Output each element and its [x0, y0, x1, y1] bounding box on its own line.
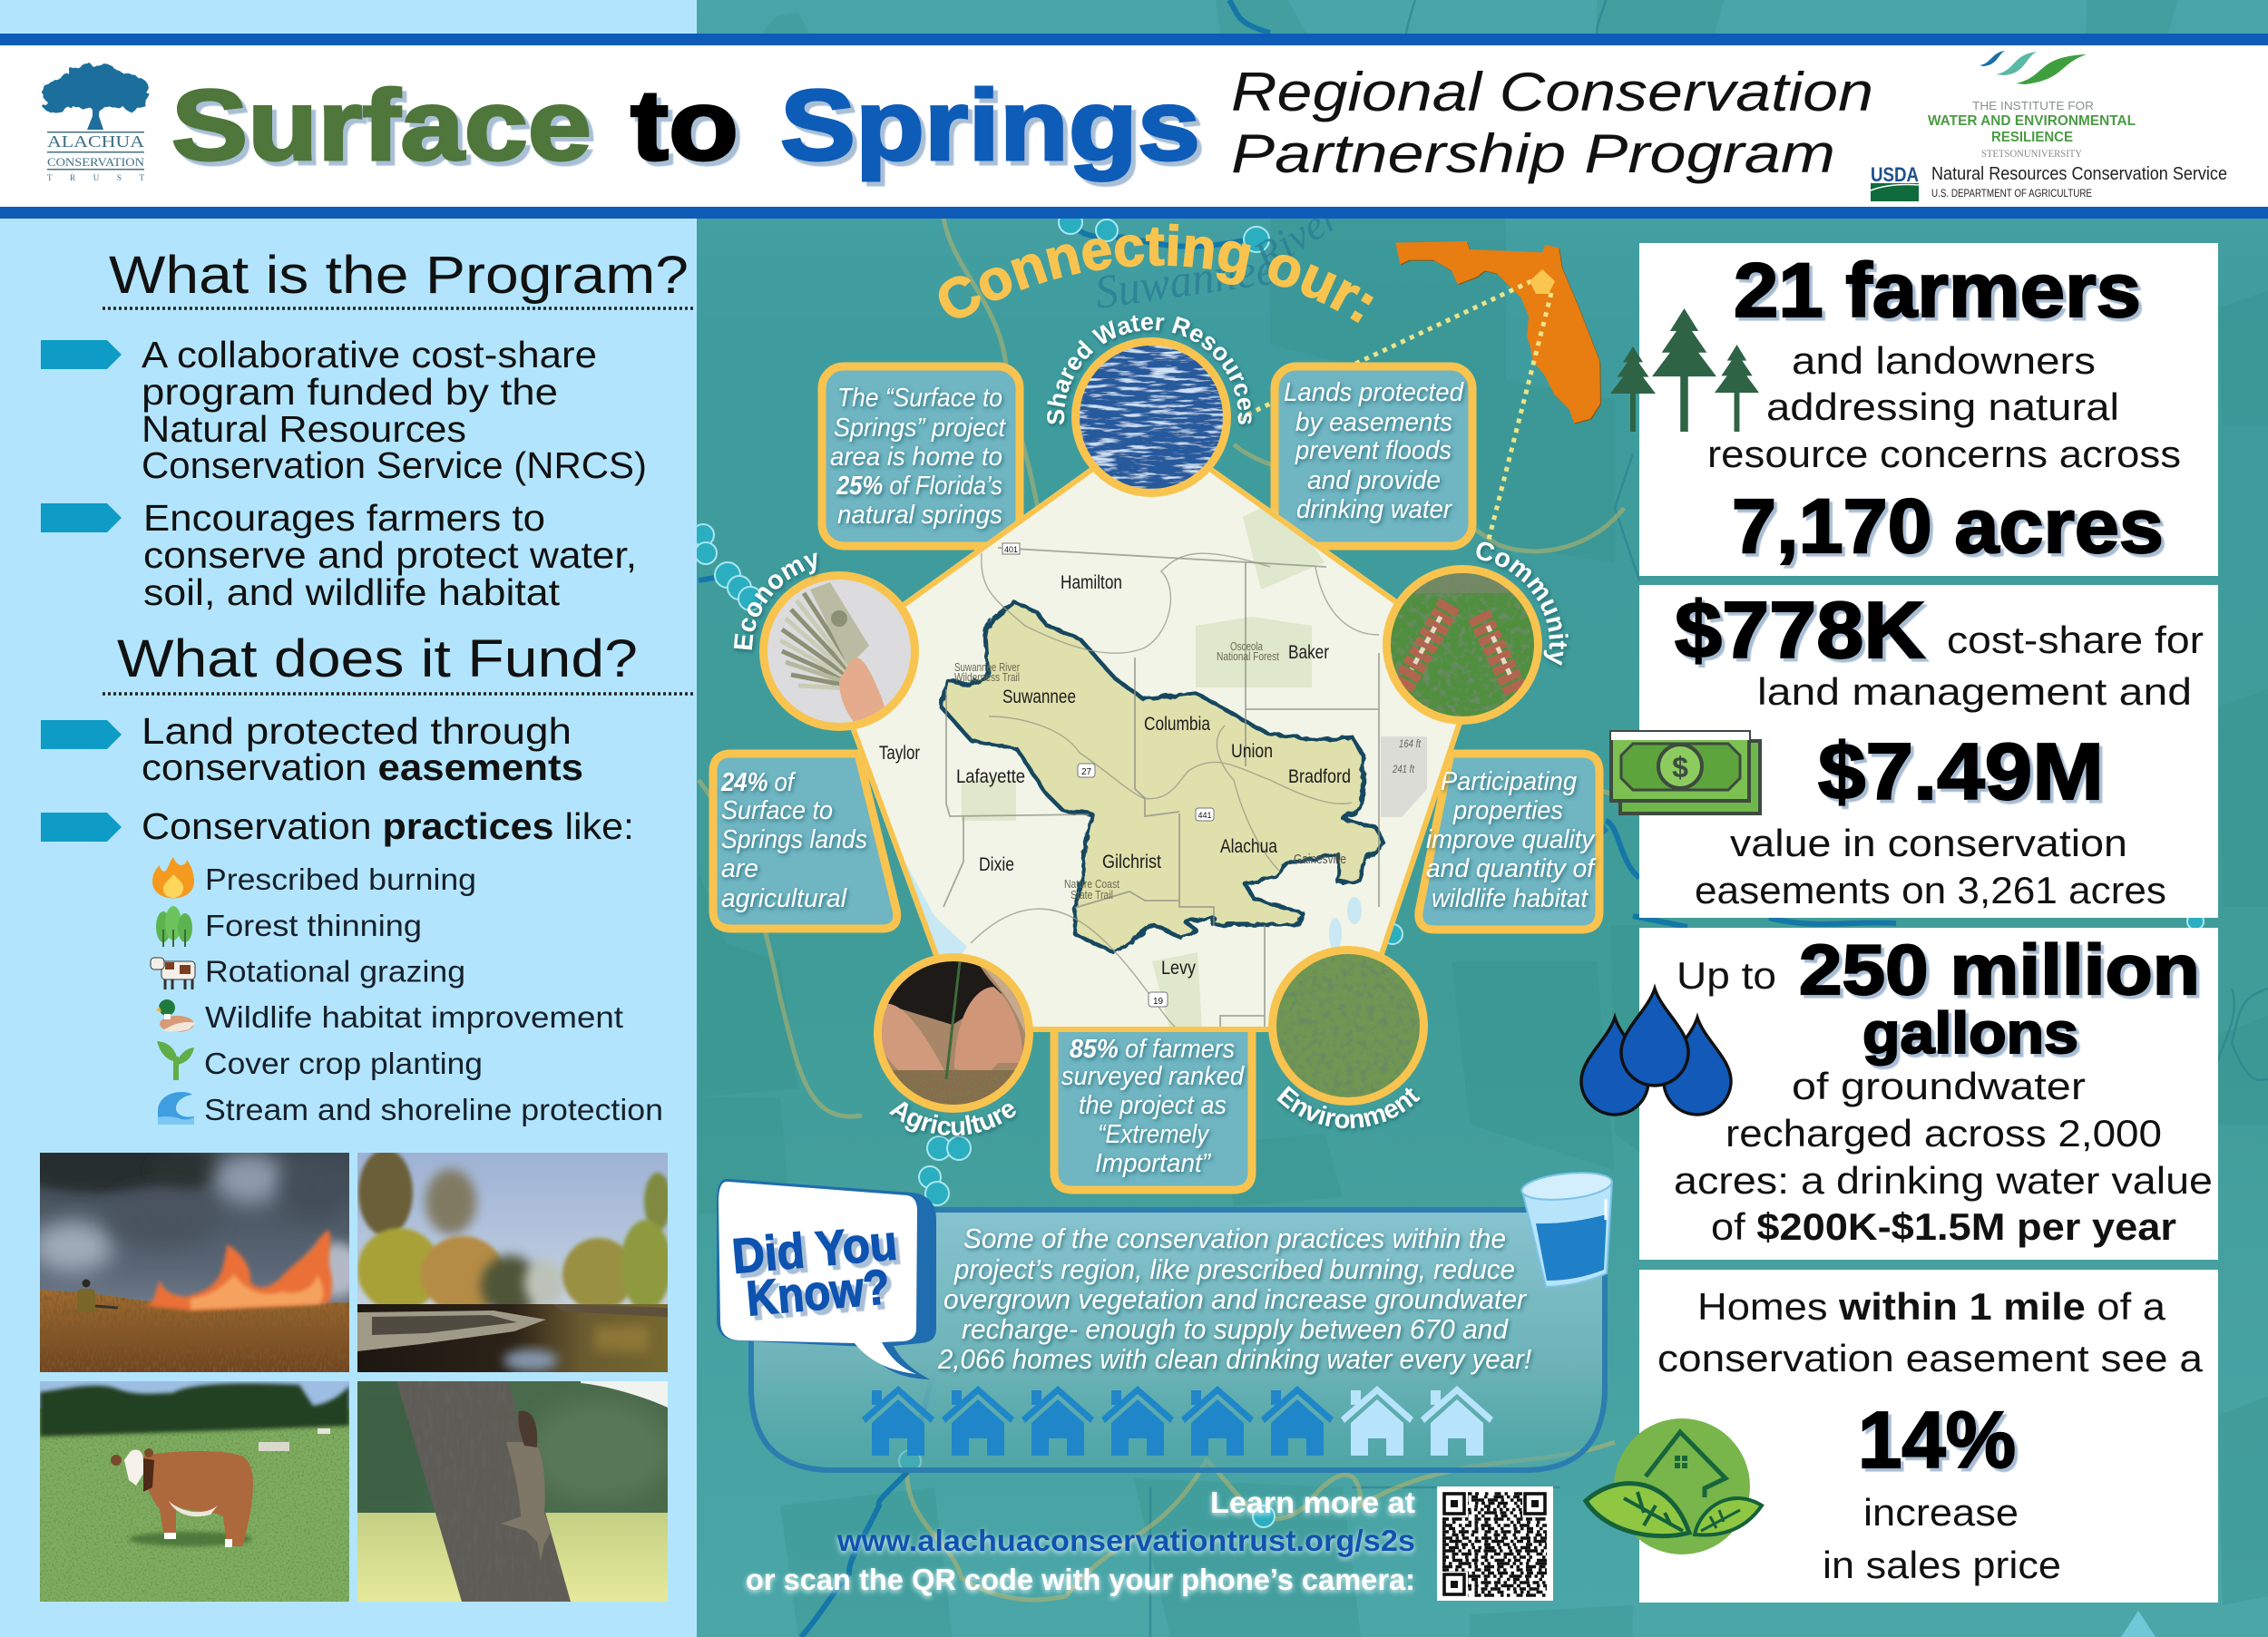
title: Surface to Springs	[171, 70, 1200, 181]
text: encourages farmers: soil, and wildlife habitat	[143, 571, 561, 613]
callout: 25% of springs: The “Surface to	[837, 384, 1002, 413]
text: encourages farmers: Encourages farmers to	[143, 497, 545, 539]
stat: $778K: $778K	[1675, 585, 1925, 675]
county labels: Lafayette	[956, 766, 1025, 787]
icon: cash: $	[1672, 751, 1688, 784]
label: Wildlife habitat improvement: Wildlife habitat improvement	[205, 1000, 623, 1034]
logo: Institute for Water and Environmental Resilience: RESILIENCE	[1991, 130, 2073, 145]
text: collaborative program: program funded by the	[142, 371, 558, 413]
logo: Institute for Water and Environmental Resilience: WATER AND ENVIRONMENTAL	[1928, 113, 2136, 129]
county labels: 241 ft	[1392, 763, 1415, 775]
description: of $200K-$1.5M per year	[1711, 1205, 2176, 1248]
county labels: Columbia	[1144, 714, 1210, 735]
callout: 85% of farmers	[1054, 1025, 1252, 1190]
icon: cash	[1611, 732, 1760, 814]
label: Forest thinning: Forest thinning	[205, 909, 422, 942]
stat: $7.49M: $7.49M	[1818, 726, 2104, 816]
text: cost-share: land management and	[1757, 670, 2192, 713]
callout: 25% of springs	[822, 366, 1020, 546]
fact text: recharge- enough to supply between 670 and	[962, 1313, 1510, 1345]
photo: prescribed fire	[40, 1153, 349, 1372]
speech bubble	[717, 1179, 936, 1379]
county labels: Osceola	[1230, 639, 1264, 653]
fact text: Some of the conservation practices within the	[963, 1223, 1506, 1254]
icon: trees	[156, 906, 192, 947]
icon: sprout	[157, 1041, 194, 1080]
county labels: Nature Coast	[1064, 877, 1119, 891]
title: Surface to Springs: Surface	[171, 70, 591, 181]
arrow bullet	[41, 503, 122, 532]
text: increase in sales price	[1823, 1491, 2061, 1586]
callout: 85% of farmers: the project as	[1079, 1091, 1227, 1120]
text: collaborative program: A collaborative cost-share	[142, 334, 597, 375]
county labels: 164 ft	[1399, 737, 1422, 750]
icon: house and leaves	[1586, 1418, 1762, 1554]
highway shields: 27	[1081, 767, 1091, 777]
text: land protected: conservation easements	[142, 746, 583, 788]
description: and landowners	[1792, 339, 2096, 382]
callout: 85% of farmers: Important”	[1095, 1149, 1211, 1178]
arrow bullet	[41, 340, 122, 369]
highway shields	[1002, 543, 1214, 1007]
title: Surface to Springs: Springs	[780, 70, 1200, 181]
watershed region	[942, 602, 1384, 953]
callout: 24% agricultural: Springs lands	[721, 825, 867, 854]
county labels: Alachua	[1220, 836, 1277, 857]
description: conservation easement see a	[1657, 1337, 2204, 1379]
logo: Alachua Conservation Trust: TRUST	[47, 173, 145, 182]
text: collaborative program: Natural Resources	[142, 408, 466, 450]
county labels: Baker	[1288, 642, 1329, 663]
circle: environment: Environment	[1276, 1086, 1422, 1132]
logo: Alachua Conservation Trust: ALACHUA	[47, 132, 144, 151]
highway shields: 441	[1198, 811, 1212, 820]
text: collaborative program	[142, 334, 647, 486]
dotted connector lines	[1234, 281, 1551, 543]
background: teal map: Suwannee	[1092, 243, 1279, 319]
description	[1674, 1065, 2213, 1248]
callout: lands protected: by easements	[1295, 408, 1452, 437]
county labels: Gilchrist	[1102, 852, 1161, 872]
callout: participating properties: wildlife habitat	[1432, 884, 1589, 913]
panel: 21 farmers	[1610, 243, 2218, 576]
callout: 25% of springs: area is home to	[830, 443, 1002, 472]
heading: Connecting our:: Connecting our:	[938, 223, 1374, 323]
panel: did you know	[717, 1169, 1613, 1470]
icon: cow	[151, 958, 195, 989]
callout: participating properties: improve quality	[1426, 825, 1595, 854]
callout: participating properties: properties	[1452, 796, 1563, 825]
text: land protected	[142, 710, 583, 788]
fact text: 2,066 homes with clean drinking water every year!	[937, 1343, 1531, 1375]
callout: lands protected: and provide	[1307, 466, 1441, 495]
logo: Alachua Conservation Trust: CONSERVATION	[47, 155, 145, 169]
learn more text: www.alachuaconservationtrust.org/s2s	[836, 1524, 1415, 1557]
callout: participating properties: and quantity of	[1426, 854, 1597, 883]
callout: 24% agricultural: agricultural	[721, 884, 848, 913]
subtitle: Regional Conservation Partnership Program	[1231, 62, 1873, 184]
label: Prescribed burning: Prescribed burning	[205, 862, 476, 896]
heading: What does it Fund?: What does it Fund?	[117, 629, 638, 688]
callout: 25% of springs: natural springs	[837, 501, 1002, 530]
icon: wave	[158, 1092, 194, 1125]
stat: 14%: 14%	[1858, 1395, 2016, 1485]
stat: 21 farmers: 21 farmers	[1734, 248, 2141, 333]
logo: Alachua Conservation Trust	[42, 64, 150, 182]
logo: Institute for Water and Environmental Resilience: THE INSTITUTE FOR	[1972, 99, 2094, 112]
circle: economy	[733, 552, 919, 731]
county labels: Hamilton	[1061, 572, 1122, 593]
circle: shared water resources: Shared Water Resources	[1047, 316, 1255, 428]
text: encourages farmers	[143, 497, 637, 613]
description: of groundwater	[1792, 1065, 2086, 1107]
left panel background	[0, 0, 697, 1637]
florida map	[1234, 241, 1601, 543]
header banner	[0, 34, 2268, 219]
callout: 24% agricultural: are	[721, 854, 758, 883]
callout: 25% of springs: Springs” project	[834, 414, 1007, 443]
stat: 7,170 acres: 7,170 acres	[1732, 483, 2164, 569]
county labels: Suwannee River	[954, 660, 1021, 674]
callout: lands protected: Lands protected	[1284, 378, 1464, 407]
photo: river	[357, 1149, 671, 1372]
label: Stream and shoreline protection: Stream and shoreline protection	[204, 1093, 663, 1126]
callout: 85% of farmers: 85% of farmers	[1070, 1035, 1235, 1064]
callout: 24% agricultural: 24% of	[720, 768, 797, 797]
county labels: Suwannee	[1002, 687, 1076, 707]
description	[1707, 339, 2181, 475]
callout: participating properties	[1419, 754, 1599, 930]
county labels: Wilderness Trail	[954, 670, 1020, 684]
heading: What is the Program?: What is the Program?	[109, 246, 689, 305]
callout: participating properties: Participating	[1441, 767, 1577, 796]
fact text: project’s region, like prescribed burning, reduce	[953, 1253, 1515, 1285]
description: resource concerns across	[1707, 433, 2181, 475]
stat: 250 million gallons	[1799, 930, 2200, 1066]
panel: funding	[1611, 585, 2218, 918]
learn more text: or scan the QR code with your phone’s camera:	[746, 1563, 1415, 1596]
county labels: Union	[1231, 741, 1273, 762]
callout: 25% of springs: 25% of Florida’s	[836, 472, 1002, 501]
icon: duck	[156, 999, 196, 1032]
label: Rotational grazing: Rotational grazing	[205, 954, 465, 989]
label: Cover crop planting: Cover crop planting	[204, 1047, 483, 1080]
county labels: Bradford	[1288, 766, 1351, 787]
description: Homes within 1 mile of a	[1697, 1285, 2166, 1328]
QR code	[1437, 1486, 1553, 1601]
speech bubble: Did You	[730, 1215, 899, 1284]
learn more text: Learn more at	[1210, 1486, 1415, 1519]
icon: fire	[152, 857, 194, 898]
text: easement value: easements on 3,261 acres	[1695, 869, 2166, 911]
text: cost-share: cost-share for	[1947, 619, 2204, 661]
circle: economy: Economy	[733, 552, 820, 653]
arrow bullet	[41, 720, 122, 749]
text: easement value: value in conservation	[1730, 822, 2127, 864]
callout: lands protected: prevent floods	[1295, 436, 1452, 465]
text: increase in sales price: increase	[1863, 1491, 2019, 1534]
callout: 85% of farmers: “Extremely	[1098, 1120, 1209, 1149]
text: increase in sales price: in sales price	[1823, 1544, 2061, 1586]
homes row: six filled, two light	[862, 1386, 1493, 1456]
text: Up to: Up to	[1677, 954, 1776, 997]
county labels: Taylor	[879, 743, 920, 764]
county labels: National Forest	[1217, 649, 1279, 663]
panel: what is the program	[41, 246, 695, 613]
description: addressing natural	[1766, 385, 2119, 428]
county labels: Gainesville	[1294, 852, 1346, 867]
circle: shared water resources	[1047, 316, 1255, 497]
county labels: Dixie	[979, 854, 1014, 875]
learn more text	[746, 1486, 1415, 1596]
callout: 24% agricultural: Surface to	[721, 796, 833, 825]
subtitle: Regional Conservation Partnership Program: Regional Conservation	[1231, 62, 1873, 122]
description: recharged across 2,000	[1725, 1112, 2162, 1155]
callout: 85% of farmers: surveyed ranked	[1061, 1062, 1245, 1091]
fact text: overgrown vegetation and increase groundwater	[943, 1283, 1528, 1315]
text: easement value	[1695, 822, 2166, 911]
highway shields: 401	[1004, 545, 1018, 554]
panel: home value	[1586, 1270, 2218, 1603]
logo: Institute for Water and Environmental Resilience: STETSONUNIVERSITY	[1981, 147, 2082, 160]
icon: pine trees	[1610, 308, 1759, 432]
description: acres: a drinking water value	[1674, 1159, 2213, 1202]
background: teal map	[692, 0, 2268, 1637]
description	[1657, 1285, 2204, 1379]
circle: agriculture: Agriculture	[889, 1101, 1018, 1139]
circle: community	[1383, 542, 1571, 725]
callout: lands protected	[1275, 366, 1472, 546]
panel: groundwater	[1581, 928, 2218, 1260]
logo: USDA NRCS: USDA	[1871, 163, 1919, 186]
county labels: State Trail	[1070, 888, 1113, 901]
county labels	[879, 543, 1422, 1007]
text: encourages farmers: conserve and protect water,	[143, 534, 637, 576]
highway shields: 19	[1153, 997, 1163, 1007]
logo: USDA NRCS	[1871, 163, 2227, 201]
callout: 24% agricultural	[713, 754, 897, 929]
text: land protected: Land protected through	[142, 710, 572, 752]
text: collaborative program: Conservation Service (NRCS)	[142, 444, 647, 486]
fact text	[937, 1223, 1531, 1375]
icon: water drops	[1581, 989, 1731, 1115]
circle: community: Community	[1476, 542, 1571, 667]
stat: 250 million gallons: gallons	[1862, 1000, 2078, 1066]
photo: cow in pasture	[40, 1381, 349, 1602]
panel: what does it fund	[41, 629, 695, 1126]
background: teal map: River	[1245, 192, 1348, 280]
county labels: Levy	[1161, 958, 1196, 979]
subtitle: Regional Conservation Partnership Program: Partnership Program	[1231, 123, 1835, 184]
photo: squirrel on tree	[345, 1369, 671, 1602]
speech bubble: Know?	[744, 1260, 892, 1326]
icon: water glass	[1520, 1169, 1613, 1287]
circle: environment	[1268, 946, 1428, 1132]
circle: agriculture	[874, 953, 1033, 1139]
logo: USDA NRCS: U.S. DEPARTMENT OF AGRICULTURE	[1931, 187, 2092, 200]
stat: 250 million gallons: 250 million	[1799, 930, 2200, 1009]
callout: lands protected: drinking water	[1296, 495, 1452, 524]
map pentagon	[717, 223, 2218, 1603]
text: conservation practices: Conservation practices like:	[142, 805, 634, 847]
text: cost-share	[1757, 619, 2204, 713]
title: Surface to Springs: to	[631, 70, 738, 181]
arrow bullet	[41, 813, 122, 842]
logo: USDA NRCS: Natural Resources Conservation Service	[1931, 164, 2227, 184]
logo: Institute for Water and Environmental Resilience	[1928, 51, 2136, 160]
